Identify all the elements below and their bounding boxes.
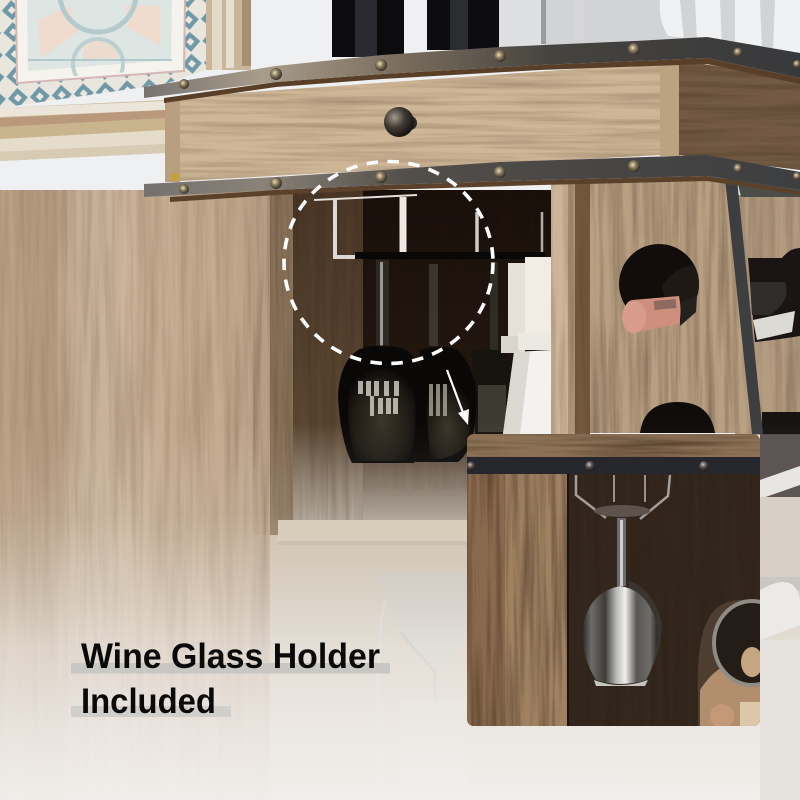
right strip contents below rack	[760, 434, 800, 800]
white fade over lower image	[0, 420, 800, 800]
center post	[551, 181, 590, 434]
shelf and ghosted lower contents	[278, 520, 468, 800]
upper drawer	[165, 60, 800, 185]
inset cork jar	[698, 599, 760, 726]
lower bottle hole	[640, 402, 715, 433]
arrow to inset	[447, 370, 469, 425]
inset wood side panel	[467, 474, 569, 726]
wine rack side panel	[585, 175, 800, 435]
inset metal band with rivets	[466, 457, 760, 474]
inset detail panel	[467, 434, 760, 726]
inset dark back panel	[569, 474, 760, 726]
hanging dark wine glasses	[338, 252, 545, 463]
heading: Wine Glass Holder Included: Wine Glass Holder	[81, 637, 380, 676]
inset glass rack	[576, 475, 670, 519]
white candle holder	[501, 257, 552, 434]
left cabinet door	[0, 190, 270, 800]
second metal band with rivets	[144, 155, 800, 202]
framed patterned artwork	[0, 0, 251, 161]
dashed highlight circle	[284, 162, 493, 364]
heading: Wine Glass Holder Included	[71, 637, 390, 721]
inset hanging glass	[583, 505, 662, 686]
wine glass rack	[314, 195, 542, 257]
open cabinet interior	[253, 190, 800, 800]
top metal band with rivets	[144, 37, 800, 103]
heading: Wine Glass Holder Included: Included	[81, 682, 216, 721]
inset wood top strip	[467, 434, 760, 457]
right wood and stored bottles behind	[735, 195, 800, 435]
items on top: bottles, glass stem, vase	[332, 0, 800, 57]
drawer knob	[384, 107, 417, 137]
round bottle hole with rosé bottle	[619, 244, 700, 333]
